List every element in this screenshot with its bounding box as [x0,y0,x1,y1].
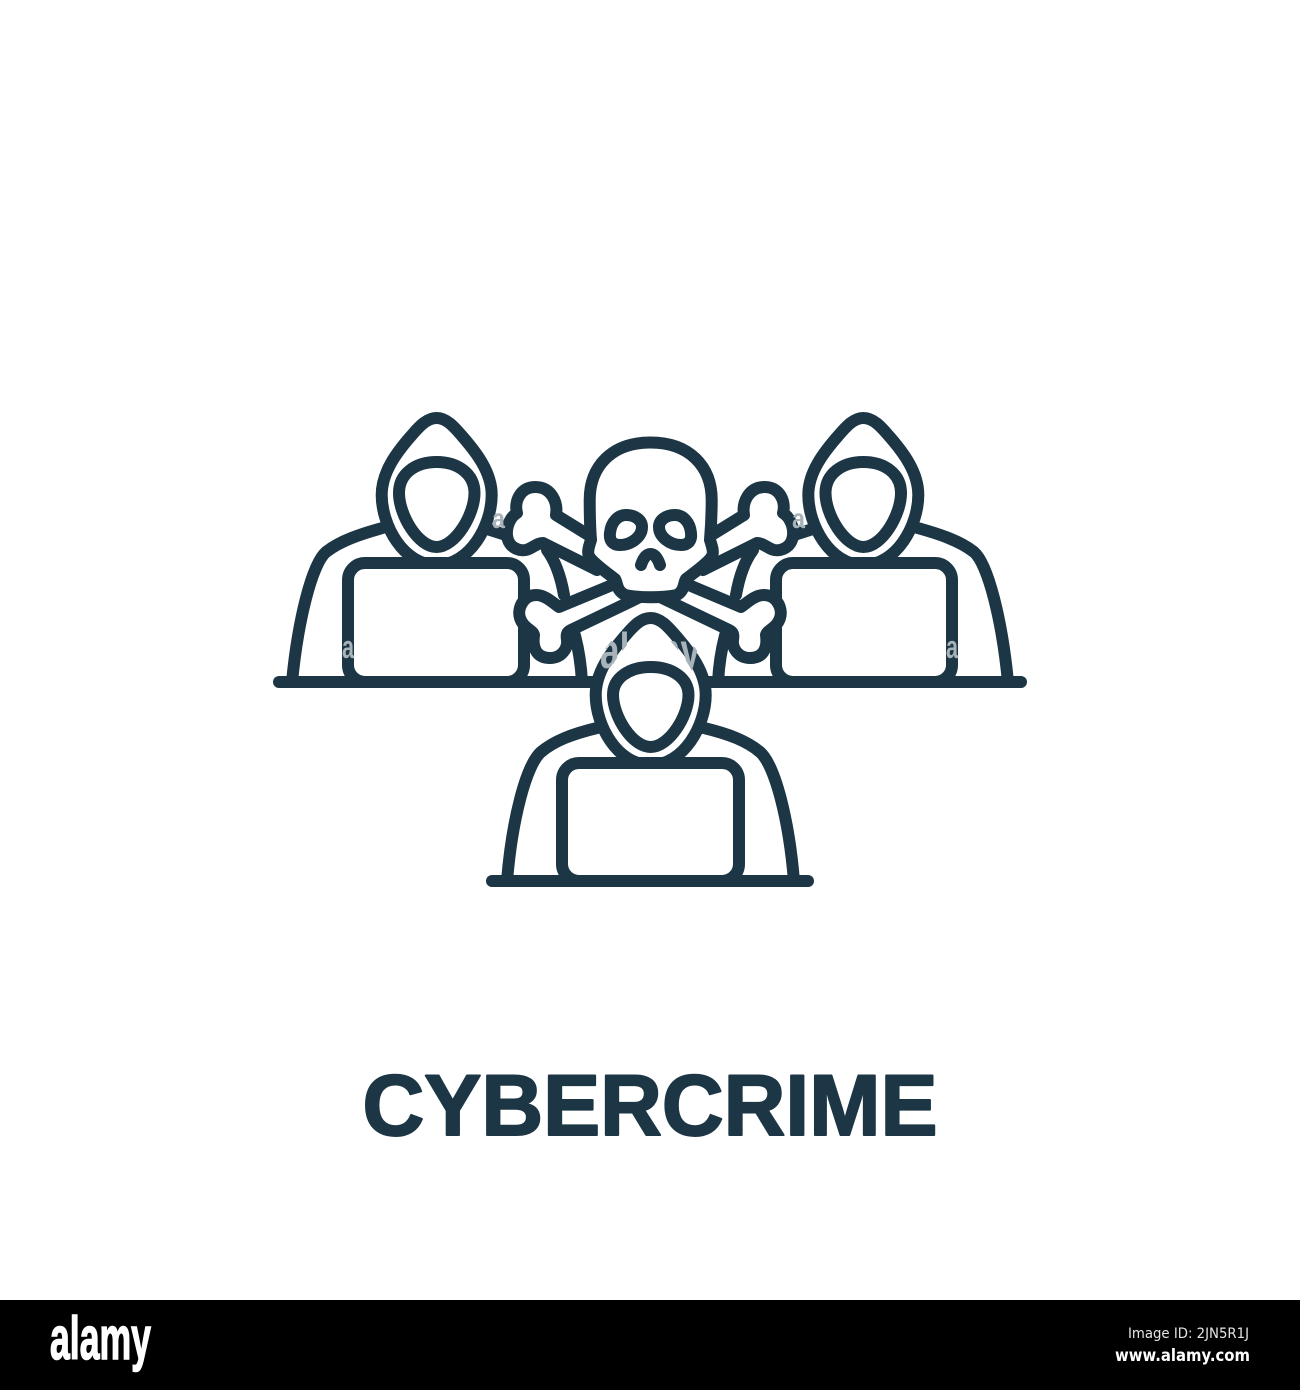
hacker: right [776,418,1008,682]
skull nose [641,554,660,565]
hacker: bottom centre [492,618,808,881]
watermark fragments: a [792,503,805,534]
title: CYBERCRIME [362,1058,938,1154]
website: www.alamy.com [1115,1346,1250,1366]
icon: cybercrime hackers and skull [279,418,1021,881]
skull figure body lines [547,550,753,682]
image id: Image ID: 2JN5R1J [1128,1326,1249,1342]
footer bar [0,1300,1300,1390]
watermark fragments: a [492,503,505,534]
skull [588,442,713,597]
watermark fragments: a [342,629,354,665]
watermark: alamy [600,623,700,679]
skull eye: right [659,515,691,545]
watermark fragments [342,503,958,665]
watermark fragments: a [946,629,958,665]
hacker: left [292,418,524,682]
footer logo: alamy [50,1305,151,1372]
crossbones [507,487,793,658]
skull eye: left [610,515,642,545]
table line [279,676,1021,688]
